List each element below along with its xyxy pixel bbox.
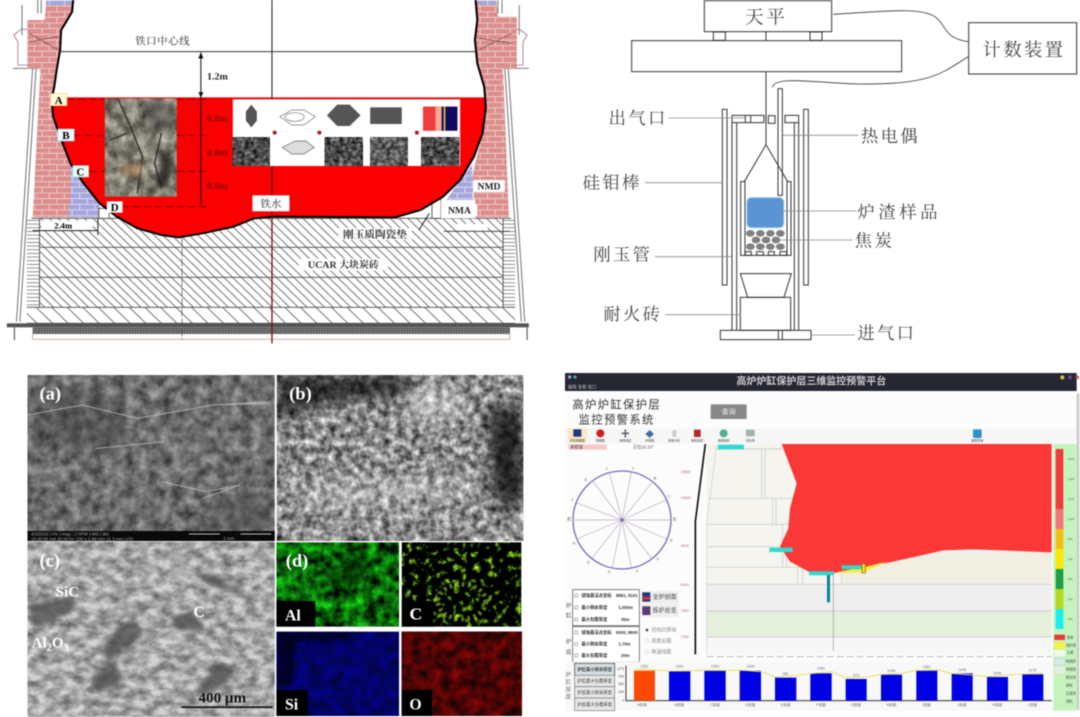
- toolbar icons: 趋势查询: [971, 437, 983, 442]
- side labels: 缸: [566, 611, 572, 619]
- bar chart of residual thickness: H剖面: [886, 702, 897, 707]
- micrograph a: 1 mm: [223, 536, 235, 541]
- temperature legend: 300: [1068, 577, 1073, 581]
- micrograph c: C: [193, 604, 205, 621]
- bar chart of residual thickness: 300: [618, 690, 624, 694]
- query button: 查询: [722, 407, 736, 416]
- EDS map Si: Si: [285, 697, 299, 713]
- height axis labels: 7000: [681, 635, 689, 639]
- apparatus labels: [583, 109, 941, 343]
- temperature legend: 500: [1068, 557, 1073, 561]
- tuyere angle circle: H: [573, 540, 576, 545]
- small ceramic columns: [99, 198, 475, 218]
- hearth wall readings: 侵蚀最深点坐标: [581, 592, 612, 599]
- bar chart of residual thickness: 600: [618, 682, 624, 686]
- NMA label: NMA: [448, 206, 471, 216]
- panel: slag experiment apparatus: [583, 1, 1077, 343]
- toolbar icons: 热负荷: [746, 437, 755, 442]
- temperature legend: 1000: [1068, 517, 1075, 521]
- bar chart of residual thickness: L剖面: [1028, 702, 1038, 707]
- sampling dashed lines: [67, 99, 210, 207]
- temperature map: [423, 107, 457, 131]
- hearth bottom readings: 最小侧余厚度: [581, 641, 608, 648]
- apparatus labels: 硅钼棒: [583, 173, 642, 192]
- bar chart of residual thickness: 1381: [923, 665, 931, 669]
- tuyere angle circle: [567, 465, 677, 574]
- micrograph thumbnails: [233, 137, 459, 166]
- temperature legend: 保护层: [1066, 642, 1077, 647]
- furnace shell line: [695, 444, 705, 654]
- micrograph c: [27, 542, 275, 717]
- toolbar icons: 电偶温度: [619, 437, 631, 442]
- display mode radio options: [645, 627, 676, 656]
- ceramic pad label: [338, 213, 429, 241]
- bar chart of residual thickness: G剖面: [851, 702, 861, 707]
- sampling point A: A: [55, 95, 63, 107]
- tuyere angle circle: F: [636, 568, 639, 573]
- micrograph c: 3: [64, 643, 69, 654]
- sampling point D: [107, 201, 123, 214]
- bar chart selector: 炉缸最大包覆厚度: [577, 678, 613, 685]
- silicon molybdenum rods: [722, 109, 808, 285]
- carbon block label: [299, 258, 388, 271]
- tuyere angle circle: 1: [606, 465, 609, 470]
- apparatus labels: 刚玉管: [593, 245, 652, 265]
- bar chart of residual thickness: 1393: [746, 665, 754, 669]
- bar chart of residual thickness: 981: [783, 672, 789, 676]
- temperature legend: 100: [1068, 617, 1073, 621]
- plot annotations: [718, 445, 865, 651]
- hearth wall readings: 最小侧余厚度: [581, 604, 608, 611]
- corundum tube: [732, 115, 799, 330]
- left refractory brick wall: [27, 0, 100, 217]
- hearth wall readings: 35m: [621, 617, 630, 622]
- micrograph a: 4/2/2015 | HV | mag □ | HFW | WD | det: [31, 532, 109, 537]
- height axis labels: 10600: [681, 496, 691, 500]
- micrograph a: (a): [39, 384, 61, 404]
- counting device: [969, 23, 1077, 74]
- micrograph a: 10:20:55 AM 20.00 kV 100 x 2.98 mm 11.3 mm LFD: [31, 536, 133, 541]
- bar chart of residual thickness: 1005: [993, 671, 1001, 675]
- angle selector: 方位20.23°: [633, 443, 654, 450]
- temperature legend: [1053, 444, 1077, 711]
- bar chart selector: 炉: [566, 671, 572, 679]
- carbon block label: UCAR 大块炭砖: [308, 258, 379, 271]
- EDS map O: [402, 632, 522, 716]
- apparatus labels: 进气口: [857, 324, 916, 343]
- bar chart of residual thickness: [617, 665, 1052, 707]
- bar chart of residual thickness: I剖面: [922, 702, 931, 707]
- tuyere angle circle: G: [608, 569, 611, 574]
- molten iron label: [252, 195, 289, 211]
- side labels: 底: [566, 648, 572, 656]
- furnace wall plot background: [707, 444, 1052, 657]
- toolbar icons: 侧壁图: [596, 437, 605, 442]
- tuyere angle circle: 西: [567, 516, 571, 521]
- thermocouple: [778, 89, 782, 195]
- apparatus labels: 热电偶: [861, 127, 920, 146]
- temperature legend: 石墨砖: [1066, 690, 1077, 695]
- hearth bottom readings: 最大包覆厚度: [581, 652, 608, 659]
- temperature legend: 刚玉砖: [1066, 674, 1077, 679]
- hearth bottom readings: [573, 627, 639, 662]
- micrograph c: SiC: [56, 585, 79, 600]
- tuyere angle circle: J: [571, 497, 573, 502]
- display mode radio options: 径向比厚线: [651, 627, 676, 634]
- signal wires: [773, 11, 968, 87]
- apparatus labels: 焦炭: [855, 232, 895, 251]
- panel: blast furnace hearth cross-section: [7, 0, 529, 343]
- cooling staves: [29, 33, 512, 50]
- sampling point B: [58, 129, 74, 142]
- bar chart of residual thickness: F剖面: [816, 702, 826, 707]
- taphole center line label: 铁口中心线: [135, 35, 190, 48]
- bar chart of residual thickness: 1375: [617, 667, 624, 671]
- height axis labels: 10800: [681, 470, 691, 474]
- title bar: [565, 373, 1079, 391]
- bar chart selector: 炉底最小侧余厚度: [577, 689, 613, 696]
- height labels: 0.8m: [207, 113, 228, 124]
- slag sample: [747, 197, 784, 228]
- micrograph c: Al: [32, 636, 47, 652]
- apparatus labels: 出气口: [609, 109, 668, 128]
- temperature legend: 1500: [1068, 457, 1075, 461]
- tuyere angle circle: 1: [632, 465, 635, 470]
- height arrow: [199, 53, 203, 205]
- bar chart of residual thickness: B剖面: [674, 702, 685, 707]
- bar chart selector: 度: [566, 693, 572, 701]
- angle selector: [568, 443, 654, 451]
- rock sample photo: [105, 98, 177, 197]
- temperature legend: 立墙: [1067, 650, 1074, 655]
- hearth bottom hatched linings: [7, 218, 529, 340]
- apparatus labels: 耐火砖: [603, 305, 662, 324]
- height axis labels: [681, 470, 691, 639]
- view buttons: 炼炉总览: [653, 606, 677, 614]
- system heading: 监控预警系统: [579, 412, 655, 426]
- 2.4m dimension: 2.4m: [54, 221, 72, 231]
- toolbar icons: [565, 428, 1077, 444]
- title bar: 编辑 查看 窗口: [568, 383, 596, 390]
- system heading: [572, 397, 661, 426]
- hearth bottom readings: 20m: [621, 653, 630, 658]
- bar chart selector: 缸: [566, 678, 572, 686]
- panel: SEM micrographs: [27, 375, 523, 717]
- sampling point B: B: [62, 130, 70, 142]
- bar chart of residual thickness: 0: [622, 699, 624, 703]
- sampling point A: [50, 94, 67, 107]
- NMD label: [473, 180, 505, 192]
- toolbar icons: 电偶监控: [691, 437, 703, 442]
- apparatus labels: 炉渣样品: [857, 203, 941, 222]
- bar chart of residual thickness: 1059: [887, 669, 895, 673]
- sampling point D: D: [111, 202, 119, 214]
- red connector dots: [273, 131, 419, 135]
- bar chart of residual thickness: 900: [618, 675, 624, 679]
- erosion profile line: [52, 0, 486, 237]
- bar chart selector: 炉缸最小侧余厚度: [577, 666, 613, 673]
- tuyere angle circle: F: [657, 556, 660, 561]
- hearth bottom readings: 1.70m: [618, 642, 631, 647]
- system heading: 高炉炉缸保护层: [572, 397, 661, 411]
- window background: [565, 391, 1077, 711]
- counting device: 计数装置: [983, 40, 1065, 60]
- bar chart of residual thickness: 1175: [1029, 669, 1037, 673]
- balance: 天平: [745, 7, 788, 28]
- EDS map Al: (d): [286, 551, 308, 572]
- hearth wall readings: [573, 590, 639, 626]
- micrograph c: (c): [39, 551, 60, 572]
- right dimension: [444, 224, 510, 231]
- bar chart of residual thickness: 1245: [958, 668, 966, 672]
- height labels: 0.8m: [207, 181, 228, 192]
- angle selector: 未校准: [570, 444, 584, 451]
- side labels: [566, 601, 572, 656]
- temperature legend: 碳砖: [1066, 682, 1073, 687]
- micrograph c: O: [52, 636, 64, 652]
- bar chart of residual thickness: 1341: [676, 665, 684, 669]
- support funnel: [740, 274, 791, 297]
- tuyere angle circle: K: [585, 477, 588, 482]
- title bar: 高炉炉缸保护层三维监控预警平台: [736, 374, 886, 387]
- bar chart of residual thickness: C剖面: [710, 702, 720, 707]
- side labels: 炉: [566, 637, 572, 645]
- tuyere angle circle: E: [670, 538, 673, 543]
- furnace outer shell lines: [13, 0, 529, 322]
- scrollbar: [1077, 393, 1079, 710]
- NMD label: NMD: [478, 182, 501, 192]
- tuyere angle circle: C: [668, 494, 671, 499]
- hearth bottom readings: 6300, 8600: [616, 630, 638, 635]
- temperature legend: 渣皮: [1067, 634, 1074, 639]
- erosion red area: [780, 444, 1052, 573]
- height axis labels: 7500: [681, 609, 689, 613]
- tuyere angle circle: B: [654, 475, 657, 480]
- toolbar icons: 炉缸剖面图: [570, 437, 585, 442]
- bar chart of residual thickness: 1393: [711, 665, 719, 669]
- molten iron red region: [52, 97, 486, 237]
- display mode radio options: 等温线图: [651, 649, 671, 656]
- micrograph c: 400 μm: [198, 691, 247, 706]
- 2.4m dimension: [33, 218, 98, 235]
- height labels: 1.2m: [207, 71, 228, 82]
- bar chart selector: 炉底最大包覆厚度: [577, 701, 613, 708]
- right blue ceramic brick: [446, 0, 497, 200]
- temperature legend: 陶瓷垫: [1066, 666, 1077, 671]
- EDS map Si: [276, 632, 399, 716]
- EDS map C: C: [409, 604, 422, 624]
- taphole center line: [60, 50, 476, 53]
- sampling point C: C: [76, 166, 84, 178]
- inner shell line: [707, 445, 717, 654]
- bar chart of residual thickness: E剖面: [781, 702, 791, 707]
- temperature legend: 1300: [1068, 477, 1075, 481]
- hearth wall readings: 8881, 9161: [616, 593, 638, 598]
- bar chart of residual thickness: D剖面: [745, 702, 756, 707]
- temperature legend: 800: [1068, 537, 1073, 541]
- leader lines: [645, 118, 858, 335]
- molten iron label: 铁水: [260, 197, 282, 210]
- side labels: 炉: [566, 601, 572, 609]
- view buttons: 全炉剖面: [653, 593, 677, 601]
- hearth wall readings: 最大包覆厚度: [581, 616, 608, 623]
- sampling point C: [73, 166, 89, 178]
- tuyere angle circle: G: [587, 560, 590, 565]
- bar chart of residual thickness: 1351: [640, 665, 648, 669]
- EDS map Al: Al: [285, 608, 301, 624]
- temperature legend: 陶瓷杯: [1066, 658, 1077, 663]
- bar chart of residual thickness: 1281: [817, 666, 825, 670]
- right refractory brick wall: [472, 0, 517, 217]
- toolbar icons: 侵蚀分析: [668, 437, 680, 442]
- bar chart of residual thickness: A剖面: [637, 702, 647, 707]
- crucible: [741, 145, 791, 255]
- query button: [711, 404, 747, 419]
- ceramic pad label: 刚玉质陶瓷垫: [343, 228, 407, 241]
- temperature legend: 填料: [1066, 698, 1073, 703]
- micrograph b: [277, 375, 523, 541]
- display mode radio options: 高度云图: [651, 637, 671, 644]
- bar chart of residual thickness: 973: [853, 673, 859, 677]
- hearth bottom readings: 侵蚀最深点坐标: [581, 629, 612, 636]
- micrograph c: 2: [47, 643, 52, 654]
- coke bed: [746, 230, 785, 250]
- bar chart of residual thickness: K剖面: [992, 702, 1003, 707]
- hearth wall readings: 1,000m: [618, 605, 633, 610]
- furnace center line: [182, 0, 272, 343]
- view buttons: [641, 591, 679, 617]
- height labels: [207, 71, 228, 192]
- top row specimens: [246, 105, 402, 154]
- toolbar icons: 炉底图: [645, 437, 654, 442]
- protective layer yellow: [835, 562, 887, 573]
- panel: monitoring software: [565, 373, 1079, 711]
- temperature legend: 200: [1068, 597, 1073, 601]
- height labels: 0.8m: [207, 147, 228, 158]
- height axis labels: 8500: [681, 583, 689, 587]
- micrograph b: (b): [289, 384, 312, 404]
- EDS map O: O: [409, 697, 422, 713]
- height axis labels: 9500: [681, 544, 689, 548]
- bar chart selector: [565, 662, 1053, 711]
- toolbar icons: 电偶趋势: [718, 437, 730, 442]
- sample analysis panel: [233, 99, 460, 166]
- hanging wire: [764, 72, 767, 145]
- base plate: [720, 330, 811, 340]
- left blue ceramic brick: [46, 0, 100, 217]
- tuyere angle circle: 东: [673, 515, 677, 521]
- support beam: [632, 41, 902, 72]
- balance: [704, 1, 832, 41]
- EDS map C: [402, 542, 521, 627]
- NMA label: [443, 204, 477, 216]
- temperature legend: 1150: [1068, 497, 1074, 501]
- micrograph a: [27, 375, 275, 541]
- bar chart of residual thickness: J剖面: [957, 702, 967, 707]
- refractory brick: [740, 297, 791, 330]
- EDS map Al: [276, 542, 399, 627]
- bar chart selector: 厚: [566, 686, 572, 693]
